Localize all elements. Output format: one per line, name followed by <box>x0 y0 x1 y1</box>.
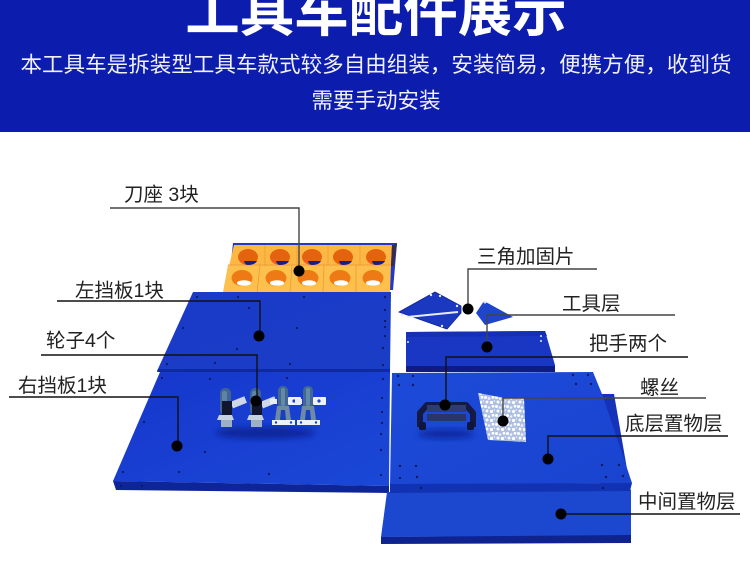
callout: right baffle: 右挡板1块 <box>18 375 107 397</box>
callout: tool shelf: 工具层 <box>562 293 621 315</box>
intro text: 本工具车是拆装型工具车款式较多自由组装，安装简易，便携方便，收到货 <box>20 53 732 77</box>
callout: middle shelf: 中间置物层 <box>638 491 736 513</box>
callout: bottom shelf <box>542 413 728 464</box>
part: left baffle panel <box>157 292 391 372</box>
part: screw bag <box>478 393 526 442</box>
callout: tool shelf <box>482 293 675 352</box>
banner: header background <box>0 0 750 132</box>
intro text <box>20 53 732 113</box>
part: tool shelf <box>406 331 555 372</box>
part: middle shelf <box>381 394 631 544</box>
part: orange tool holders <box>223 243 397 292</box>
callout: triangular brackets <box>462 246 597 314</box>
part: two handles <box>418 405 474 439</box>
part: triangular brackets <box>399 292 513 329</box>
part: right baffle panel <box>113 372 390 493</box>
callout: handles <box>440 333 688 410</box>
callout: tool holders: 刀座 3块 <box>124 184 199 206</box>
callout: left baffle <box>57 280 264 342</box>
callout: triangular brackets: 三角加固片 <box>477 246 575 268</box>
callout: casters <box>41 330 262 406</box>
intro text: 需要手动安装 <box>311 89 441 113</box>
callout: screws: 螺丝 <box>640 377 679 399</box>
part: four casters <box>215 386 326 439</box>
part: bottom shelf <box>390 372 632 493</box>
callout: screws <box>498 377 706 426</box>
callout: left baffle: 左挡板1块 <box>75 280 164 302</box>
callout: right baffle <box>9 375 182 452</box>
callout: middle shelf <box>556 491 740 520</box>
callout: handles: 把手两个 <box>589 333 667 355</box>
callout: bottom shelf: 底层置物层 <box>625 413 723 435</box>
callout: tool holders <box>110 184 304 276</box>
callout: casters: 轮子4个 <box>46 330 115 352</box>
